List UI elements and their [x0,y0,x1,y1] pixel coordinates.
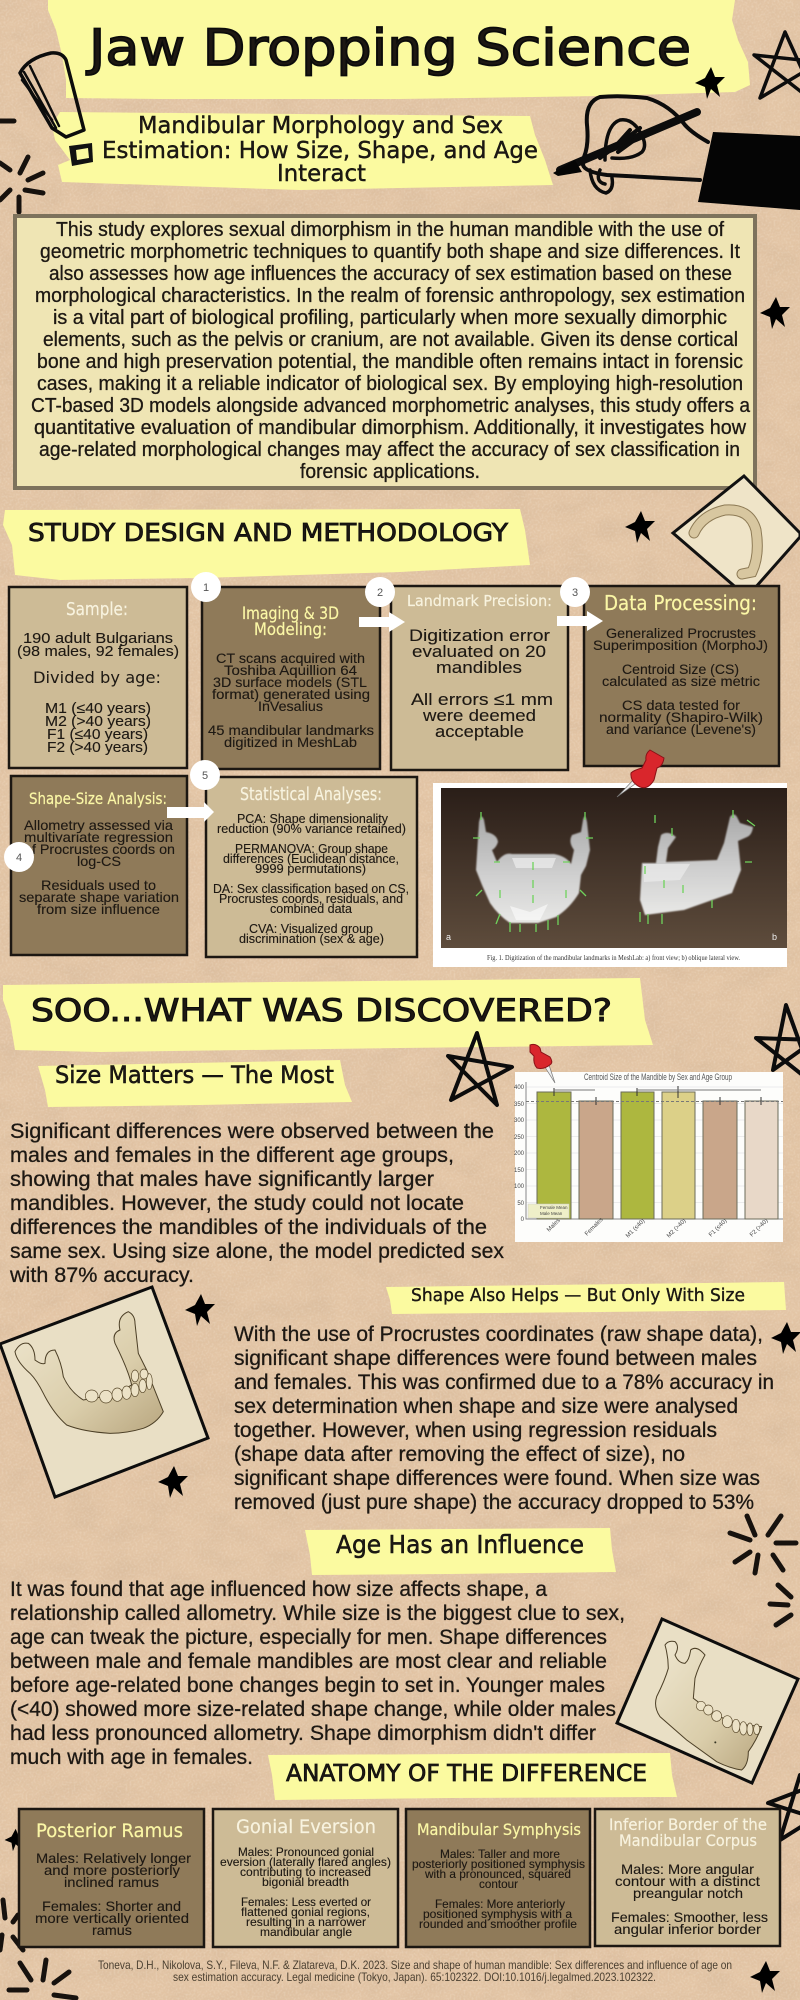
heading: shape also helps banner [386,1282,786,1314]
panel heading: landmark: Landmark Precision: [407,592,552,610]
subtitle: Interact [277,161,366,187]
text: age findings: much with age in females. [10,1745,253,1769]
icon: outline star bottom right [768,1775,800,1840]
panel: posterior ramus [19,1809,204,1947]
text: size findings [9,1119,504,1287]
imaging text: CT scans acquired with [216,651,365,666]
step badge 2: 2 [377,587,383,599]
shape-size text: from size influence [37,901,160,917]
chart legend [528,1204,569,1218]
figure letters: a [446,932,451,942]
step badge 3: 3 [572,587,578,599]
x axis labels: F2 (>40) [749,1218,770,1238]
sample text: F2 (>40 years) [47,740,148,756]
icon: star below-right of picture [158,1466,188,1498]
mandibular symphysis text: with a pronounced, squared [424,1867,571,1881]
imaging text: digitized in MeshLab [224,735,357,750]
panel heading: imaging: Imaging & 3D [242,604,339,624]
x axis labels: F1 (≤40) [708,1218,728,1238]
heading: size matters banner: Size Matters — The Most [55,1061,334,1089]
subtitle: Estimation: How Size, Shape, and Age [102,138,538,164]
intro text: elements, such as the pelvis or cranium, are not available. Given its dense cortical [43,329,738,351]
arrow: landmark to data [557,611,603,631]
step badge 4 [4,842,34,872]
text: size findings: with 87% accuracy. [9,1263,194,1287]
text: shape findings: With the use of Procrustes coordinates (raw shape data), [234,1322,763,1346]
subtitle: Mandibular Morphology and Sex [138,113,503,139]
data processing text: Superimposition (MorphoJ) [593,638,768,653]
y axis labels: 300 [514,1118,525,1124]
statistical text: discrimination (sex & age) [239,932,384,946]
text: age findings: age can tweak the picture, especially for men. Shape differences [10,1625,607,1649]
data processing text: calculated as size metric [602,674,760,689]
heading: anatomy banner [268,1753,677,1800]
chart legend: Male Mean [540,1211,563,1216]
icon: sunburst left side [0,1900,23,1950]
shape-size text [19,817,179,917]
panel: inferior border [595,1809,780,1946]
subtitle banner [52,112,553,190]
text: size findings: mandibles. However, the study could not locate [10,1191,464,1215]
chart title: Centroid Size of the Mandible by Sex and Age Group [584,1072,732,1082]
subtitle [102,113,538,187]
x axis labels: Females [584,1217,605,1237]
picture: mandible tilted right [617,1619,798,1783]
heading: shape also helps banner: Shape Also Helps — But Only With Size [411,1285,745,1306]
inferior border text: Females: Smoother, less [611,1909,768,1925]
step badge 4: 4 [16,852,22,864]
posterior ramus text: inclined ramus [64,1874,159,1890]
panel: imaging and 3D modeling [202,587,380,769]
icon: star right edge [771,1322,800,1354]
posterior ramus text: ramus [92,1922,132,1938]
posterior ramus text: and more posteriorly [44,1862,180,1878]
y axis labels: 200 [514,1151,525,1157]
heading: discovered banner: SOO...WHAT WAS DISCOVERED? [31,993,612,1029]
mandible front view [473,812,593,932]
icon: sunburst right upper [730,1516,796,1573]
icon: sunburst top left [0,121,43,212]
data processing text: and variance (Levene's) [606,722,756,737]
text: size findings: males and females in the different age groups, [10,1143,454,1167]
title banner [48,0,750,99]
text: shape findings: together. However, when using regression residuals [234,1418,717,1442]
mandible oblique view [640,810,755,924]
landmark text: acceptable [435,722,524,741]
text: shape findings: (shape data after removing the effect of size), no [234,1442,685,1466]
error bars and significance lines [526,1086,783,1105]
y axis labels [514,1085,525,1223]
icon: red push pin on figure [617,750,664,797]
shape-size text: log-CS [77,853,121,869]
icon: diamond jaw top view [673,476,800,597]
statistical text: PERMANOVA: Group shape [235,842,388,856]
panel: landmark precision [391,586,568,770]
bars [537,1092,778,1219]
shape-size text: Allometry assessed via [24,817,173,833]
panel: statistical analyses [206,777,417,957]
text: size findings: Significant differences were observed between the [10,1119,494,1143]
panel heading: data processing: Data Processing: [604,591,757,615]
intro text: forensic applications. [300,461,480,483]
icon: star bottom right [750,1961,780,1993]
intro text: is a vital part of biological profiling, particularly when more sexually dimorphic [53,307,727,329]
panel heading: shape-size: Shape-Size Analysis: [29,789,167,808]
y axis labels: 100 [514,1184,525,1190]
panel heading: mandibular symphysis: Mandibular Symphysis [417,1820,581,1839]
mandibular symphysis text: contour [479,1877,518,1891]
step badge 5: 5 [202,770,208,782]
icon: red push pin on chart [530,1044,555,1083]
icon: outline star top right [754,32,800,105]
arrow: shape-size to statistics [167,802,214,822]
text: age findings: before age-related bone changes begin to set in. Younger males [10,1673,605,1697]
inferior border text: Males: More angular [621,1861,754,1877]
landmark text: evaluated on 20 [412,642,546,661]
data processing text [593,626,768,737]
y axis labels: 50 [517,1201,525,1207]
step badge 1 [191,572,221,602]
gonial eversion text: Males: Pronounced gonial [238,1845,374,1859]
mandibular symphysis text: positioned symphysis with a [423,1907,572,1921]
figure: digitized mandible landmarks [433,783,787,967]
mandibular symphysis text: Males: Taller and more [440,1847,560,1861]
y axis labels: 250 [514,1135,525,1141]
sample text: Divided by age: [33,668,161,687]
imaging text [208,651,374,750]
intro text [31,219,751,483]
panel: intro summary [15,216,755,488]
sample text [17,631,179,756]
imaging text: Toshiba Aquillion 64 [224,663,358,678]
sample text: M1 (≤40 years) [45,701,151,717]
figure letters: b [772,932,777,942]
panel heading: inferior border: Inferior Border of the [609,1815,767,1834]
text: shape findings [234,1322,774,1514]
gonial eversion text: eversion (laterally flared angles) [220,1855,391,1869]
mandibular symphysis text: posteriorly positioned symphysis [412,1857,585,1871]
landmark text: Digitization error [409,626,550,645]
posterior ramus text: Males: Relatively longer [36,1850,191,1866]
panel heading: sample: Sample: [66,599,128,620]
icon: sunburst right lower [770,1585,791,1625]
heading: age influence banner [305,1528,616,1575]
data processing text: CS data tested for [622,698,741,713]
panel: data processing [584,586,779,766]
figure caption: Fig. 1. Digitization of the mandibular landmarks in MeshLab: a) front view; b) oblique lateral view. [487,954,740,962]
text: shape findings: sex determination when shape and size were analysed [234,1394,738,1418]
statistical text: 9999 permutations) [255,862,366,876]
text: age findings: had less pronounced allometry. Shape dimorphism didn't differ [10,1721,596,1745]
step badge 2 [365,577,395,607]
mandibular symphysis text: Females: More anteriorly [435,1897,565,1911]
panel: mandibular symphysis [406,1809,590,1947]
landmark text: All errors ≤1 mm [411,690,553,709]
intro text: quantitative evaluation of mandibular dimorphism. Additionally, it investigates how [34,417,747,439]
statistical text: combined data [270,902,352,916]
gonial eversion text: bigonial breadth [262,1875,349,1889]
x axis labels: Males [546,1218,562,1233]
statistical text [213,812,409,946]
panel heading: inferior border [609,1815,767,1850]
icon: large outline star [448,1033,512,1105]
sample text: 190 adult Bulgarians [23,631,173,647]
text: shape findings: significant shape differences were found between males [234,1346,757,1370]
statistical text: Procrustes coords, residuals, and [219,892,403,906]
heading: study design banner [3,509,530,580]
step badge 1: 1 [203,582,209,594]
text: age findings: (<40) showed more size-related shape change, while older males [10,1697,616,1721]
citation: sex estimation accuracy. Legal medicine (Tokyo, Japan). 65:102322. DOI:10.1016/j.legalmed.2023.102322. [173,1970,656,1984]
intro text: geometric morphometric techniques to quantify both shape and size differences. It [40,241,740,263]
text: age findings [10,1577,625,1769]
y axis labels: 400 [514,1085,525,1091]
panel heading: gonial eversion: Gonial Eversion [236,1816,376,1838]
inferior border text: preangular notch [633,1885,743,1901]
x axis labels [546,1217,770,1239]
heading: size matters banner [38,1060,352,1107]
panel heading: statistical: Statistical Analyses: [240,784,382,805]
shape-size text: Residuals used to [41,877,156,893]
y axis labels: 350 [514,1102,525,1108]
icon: small star top [695,67,725,99]
sample text: M2 (>40 years) [45,714,151,730]
mandibular symphysis text: rounded and smoother profile [419,1917,577,1931]
panel: gonial eversion [213,1809,398,1947]
heading: anatomy banner: ANATOMY OF THE DIFFERENCE [286,1761,647,1787]
gonial eversion text: contributing to increased [240,1865,371,1879]
imaging text: InVesalius [258,699,323,714]
data processing text: Centroid Size (CS) [622,662,739,677]
statistical text: DA: Sex classification based on CS, [213,882,409,896]
icon: star above-right of picture [185,1294,215,1326]
mandibular symphysis text [412,1847,585,1931]
imaging text: 3D surface models (STL [213,675,368,690]
title: Jaw Dropping Science [86,19,691,77]
icon: star beside intro [760,297,790,329]
statistical text: CVA: Visualized group [249,922,373,936]
imaging text: format) generated using [212,687,370,702]
gonial eversion text: flattened gonial regions, [241,1905,370,1919]
x axis labels: M2 (>40) [666,1218,688,1239]
panel heading: inferior border: Mandibular Corpus [619,1831,757,1850]
y axis labels: 0 [521,1217,525,1223]
inferior border text: contour with a distinct [615,1873,760,1889]
figure letters [446,932,777,942]
arrow: imaging to landmark [359,612,405,632]
panel: shape-size analysis [11,776,187,955]
heading: age influence banner: Age Has an Influence [336,1530,584,1559]
text: age findings: It was found that age influenced how size affects shape, a [10,1577,547,1601]
gonial eversion text [220,1845,391,1939]
statistical text: reduction (90% variance retained) [217,822,406,836]
inferior border text: angular inferior border [614,1921,761,1937]
imaging text: 45 mandibular landmarks [208,723,374,738]
posterior ramus text: more vertically oriented [35,1910,189,1926]
text: shape findings: removed (just pure shape) the accuracy dropped to 53% [234,1490,754,1514]
step badge 5 [190,760,220,790]
icon: star left edge [4,1829,26,1851]
text: size findings: showing that males have significantly larger [10,1167,434,1191]
posterior ramus text: Females: Shorter and [42,1898,181,1914]
sample text: F1 (≤40 years) [47,727,148,743]
heading: discovered banner [3,978,653,1052]
intro text: also assesses how age influences the accuracy of sex estimation based on these [49,263,732,285]
posterior ramus text [35,1850,191,1938]
statistical text: differences (Euclidean distance, [223,852,399,866]
shape-size text: of Procrustes coords on [24,841,175,857]
shape-size text: multivariate regression [24,829,173,845]
text: size findings: same sex. Using size alone, the model predicted sex [10,1239,504,1263]
x axis labels: M1 (≤40) [625,1218,646,1239]
text: shape findings: and females. This was confirmed due to a 78% accuracy in [234,1370,774,1394]
panel heading: imaging [242,604,339,640]
chart grid and axes [526,1082,783,1219]
panel heading: imaging: Modeling: [254,620,327,640]
gonial eversion text: resulting in a narrower [246,1915,366,1929]
icon: sunburst bottom left [9,1960,76,1998]
citation [98,1958,732,1984]
chart legend: Female Mean [540,1205,568,1210]
landmark text [409,626,553,741]
icon: hand writing with pen [553,96,800,210]
shape-size text: separate shape variation [19,889,179,905]
icon: star by study design [625,511,655,543]
text: age findings: between male and female mandibles are most clear and reliable [10,1649,607,1673]
bar chart: centroid size [514,1072,783,1242]
intro text: bone and high preservation potential, the mandible often remains intact in forensic [37,351,743,373]
sample text: (98 males, 92 females) [17,644,179,660]
intro text: cases, making it a reliable indicator of biological sex. By employing high-resolution [37,373,743,395]
gonial eversion text: mandibular angle [260,1925,352,1939]
text: shape findings: significant shape differences were found. When size was [234,1466,760,1490]
text: age findings: relationship called allometry. While size is the biggest clue to sex, [10,1601,625,1625]
intro text: This study explores sexual dimorphism in the human mandible with the use of [56,219,724,241]
data processing text: normality (Shapiro-Wilk) [599,710,763,725]
y axis labels: 150 [514,1168,525,1174]
statistical text: PCA: Shape dimensionality [237,812,389,826]
inferior border text [611,1861,768,1937]
step badge 3 [560,577,590,607]
landmark text: were deemed [422,706,536,725]
panel: sample [9,587,187,768]
intro text: morphological characteristics. In the realm of forensic anthropology, sex estimation [35,285,745,307]
intro text: CT-based 3D models alongside advanced morphometric analyses, this study offers a [31,395,751,417]
heading: study design banner: STUDY DESIGN AND METHODOLOGY [28,518,509,547]
icon: pencil [20,53,93,166]
icon: outline star right edge [756,1005,800,1085]
gonial eversion text: Females: Less everted or [241,1895,371,1909]
data processing text: Generalized Procrustes [606,626,756,641]
picture: mandible tilted left [0,1287,208,1497]
intro text: age-related morphological changes may affect the accuracy of sex classification in [39,439,740,461]
text: size findings: differences the mandibles of the individuals of the [10,1215,487,1239]
panel heading: posterior ramus: Posterior Ramus [36,1820,183,1842]
landmark text: mandibles [436,658,522,677]
